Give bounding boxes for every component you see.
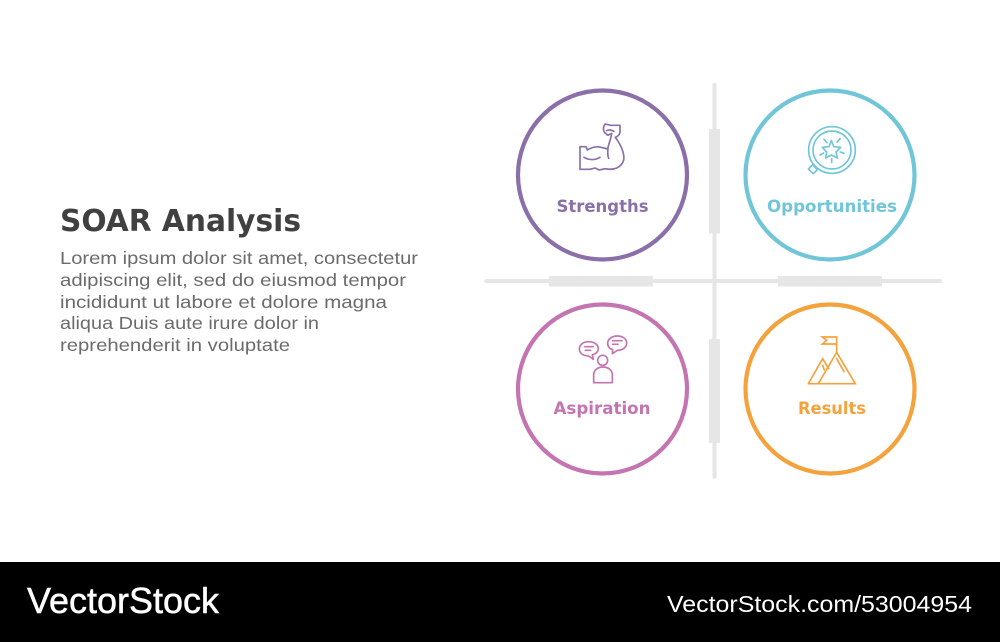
title: SOAR Analysis	[60, 204, 301, 239]
panel: Strengths	[518, 90, 687, 260]
aspiration circle	[518, 304, 687, 474]
strengths circle	[518, 90, 687, 260]
icon: mountain with flag	[808, 337, 855, 384]
panel: Aspiration	[518, 304, 687, 474]
footer url: VectorStock.com/53004954	[667, 591, 972, 617]
icon: person with speech bubbles	[579, 336, 627, 383]
description text block: adipiscing elit, sed do eiusmod tempor	[60, 270, 406, 290]
results circle	[746, 304, 914, 474]
icon: flexed arm	[580, 124, 624, 170]
description text block: aliqua Duis aute irure dolor in	[60, 313, 319, 333]
aspiration label: Aspiration	[554, 399, 650, 419]
opportunities circle	[746, 90, 914, 260]
description text block: reprehenderit in voluptate	[60, 335, 290, 355]
footer bar	[0, 562, 1000, 642]
cross divider	[484, 83, 942, 479]
strengths label: Strengths	[556, 197, 648, 217]
opportunities label: Opportunities	[767, 197, 897, 217]
panel: Results	[746, 304, 914, 474]
panel: Opportunities	[746, 90, 914, 260]
icon: magnifier with star	[808, 127, 855, 174]
description text block: Lorem ipsum dolor sit amet, consectetur	[60, 248, 418, 268]
results label: Results	[798, 399, 866, 419]
description text block	[60, 248, 418, 355]
footer logo wordmark: VectorStock	[27, 580, 220, 621]
description text block: incididunt ut labore et dolore magna	[60, 292, 387, 312]
